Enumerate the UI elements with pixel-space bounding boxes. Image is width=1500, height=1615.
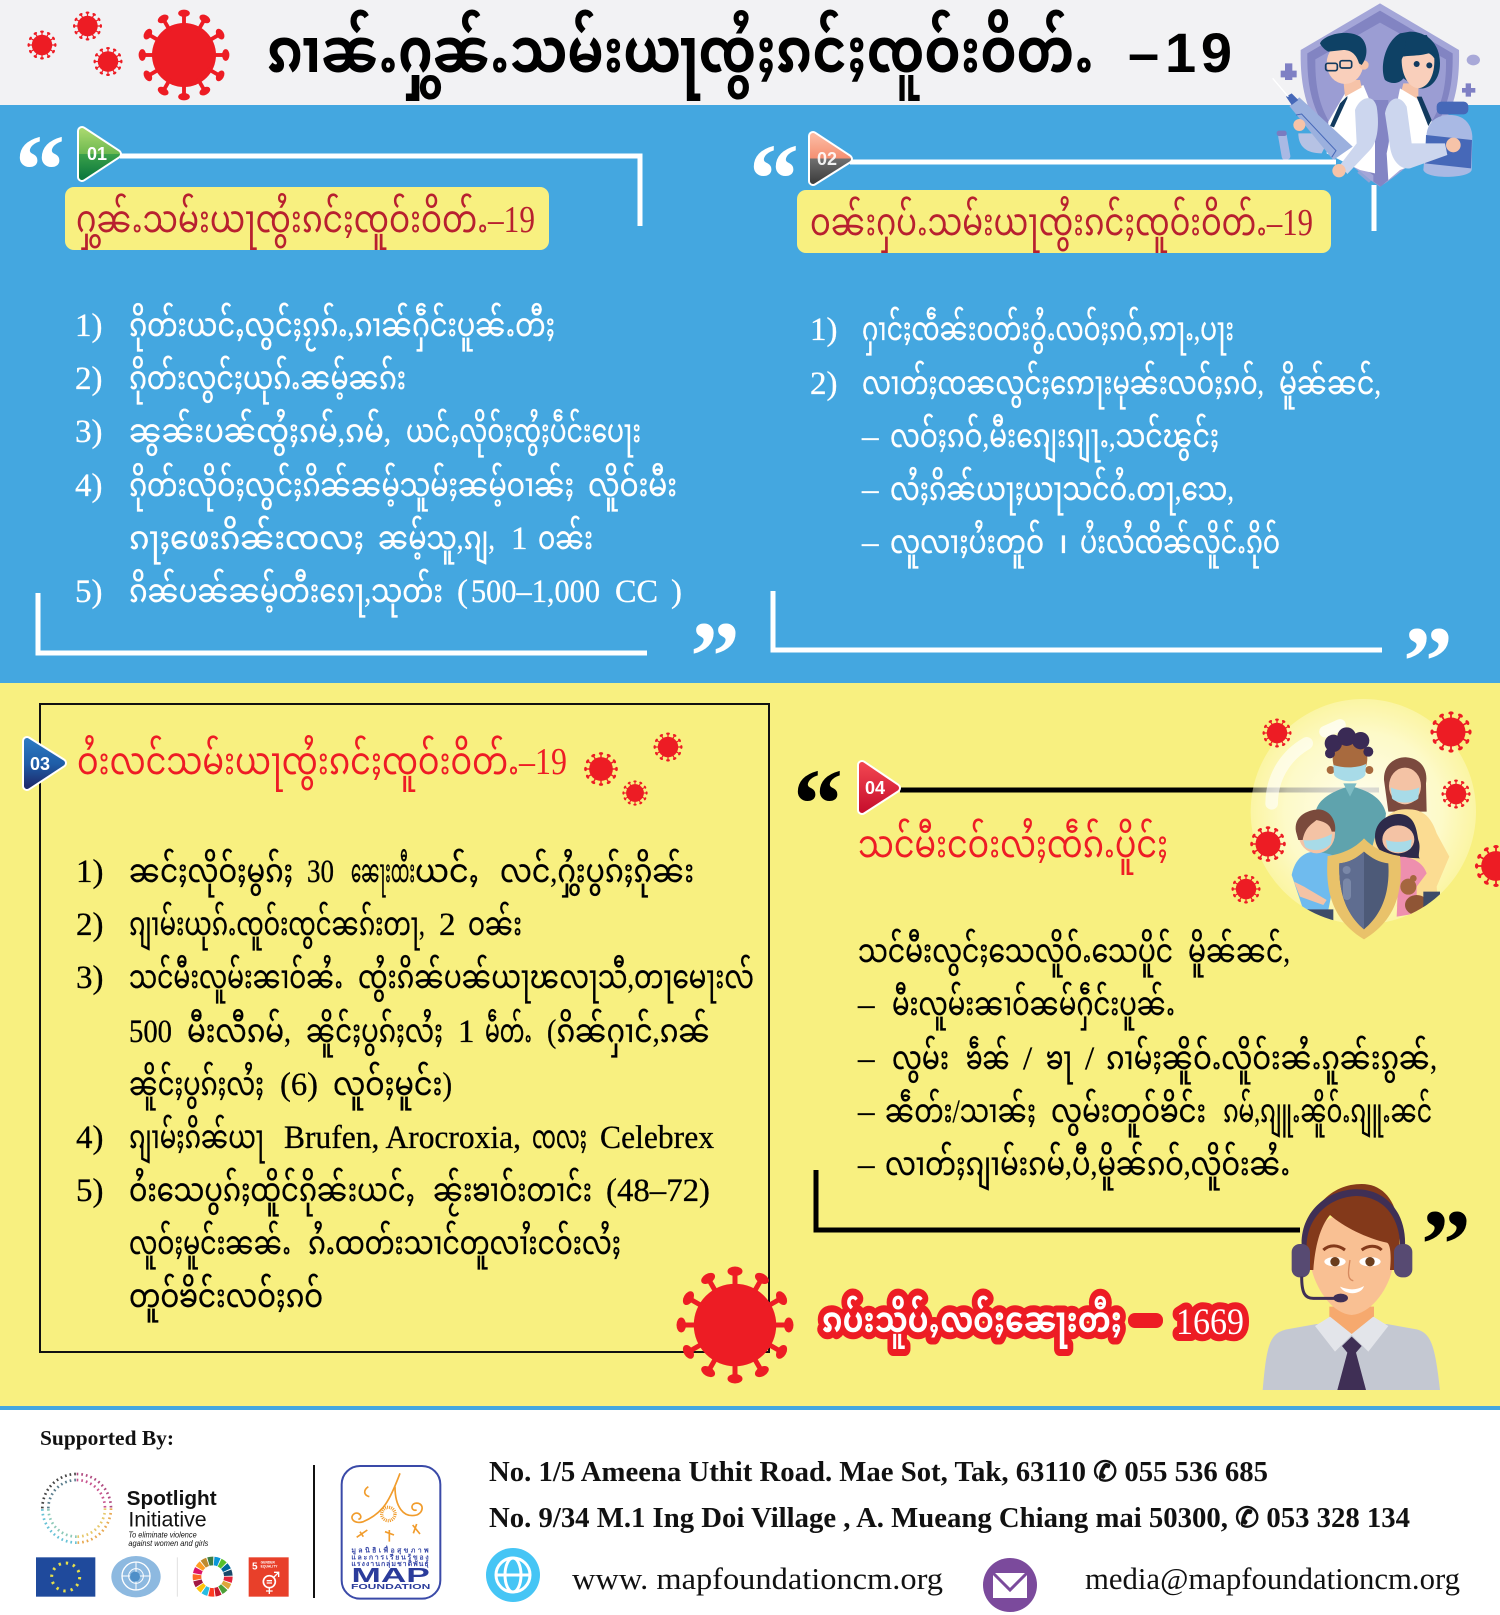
list 3: (ၵိၼ်ႁၢင်,ၵၼ် [547,1008,710,1057]
supported by: Supported By: [40,1426,174,1450]
list 3 [76,848,754,1322]
list 2: လဝ်ႈၵဝ်,မီးၵျေးၵျႃႉ,သင်ၽွင်ႈ [890,413,1219,462]
SDG 5 tile: 5 [252,1561,258,1572]
list 3: လူဝ်ႈမူင်း) [333,1061,452,1110]
SDG 5 tile: GENDER [261,1560,275,1564]
frame [40,704,769,1352]
list 3: (6) [280,1067,318,1103]
quote open: “ [15,114,65,225]
list 1: ၵိုတ်းယင်ႇလွင်ႈၵႂၵ်ႉ,ၵၢၼ်ႁဵင်းပူၼ်ႉတီႈ [129,302,555,351]
MAP logo [342,1466,440,1599]
list 2: – [861,525,879,561]
list 2: – [861,419,879,455]
SDG 5 tile [249,1557,289,1597]
EU flag [36,1557,95,1597]
panel: card 1 [15,114,740,712]
list 2: ၊ [1059,525,1068,561]
list 3: 5) [76,1173,104,1209]
list 3: 500 [129,1014,172,1050]
spotlight logo text [127,1487,217,1548]
list 3: 1 [458,1014,474,1050]
hotline: ၵပ်းသိူပ်ႇလဝ်ႈၼေႃးတီႈ [822,1295,1122,1349]
list 3: ၼင်ႈလိုဝ်ႈမွၵ်ႈ [129,848,293,897]
badge 02: 02 [817,149,837,169]
list 1: 1) [75,308,102,344]
list 3: Celebrex [600,1120,714,1156]
UN emblem [111,1556,161,1597]
address 2: No. 9/34 M.1 Ing Doi Village , A. Mueang Chiang mai 50300, ✆ 053 328 134 [489,1503,1410,1534]
frame bottom [816,1170,1300,1230]
website: www. mapfoundationcm.org [572,1561,943,1596]
text block: – [857,1147,875,1183]
heading box: ႁွၼ်ႉသမ်းယႃၸွႆးၵင်ႈၸူဝ်းဝိတ်ႉ–19 [76,193,535,250]
list 3: သင်မီးလူမ်းၼၢဝ်ၼႆႉ [129,954,343,1003]
list 3: ၵျၢမ်ႈၵိၼ်ယႃ [129,1114,265,1163]
logos: partners [36,1474,289,1597]
icon: globe [486,1548,540,1602]
SDG wheel [197,1561,228,1592]
list 1: ) [671,574,682,610]
list 3: မဵတ်ႉ [485,1008,532,1050]
badge 04: 04 [865,778,885,798]
list 3: 2 [439,907,456,943]
list 3: 4) [76,1120,104,1156]
list 1: ( [457,574,468,610]
text block: – [857,987,875,1023]
heading: သင်မီးငဝ်းလႆႈၸဵၵ်ႉပိူင်ႈ [858,818,1168,875]
list 1: ယင်ႇလိုဝ်ႈၸွႆႈပဵင်းပေႃး [406,408,641,457]
title: – [1128,21,1159,84]
list 1 [75,302,682,617]
list 3: ဝႆးသေပွၵ်ႈထိူင်ၵိုၼ်းယင်ႇ [129,1167,415,1216]
address 1: No. 1/5 Ameena Uthit Road. Mae Sot, Tak, 63110 ✆ 055 536 685 [489,1457,1268,1488]
list 3: ၸလႈ [532,1120,587,1156]
badge 03 [27,741,62,786]
text block: / [1085,1041,1095,1077]
text block: – [857,1041,875,1077]
list 2: မိူၼ်ၼင်, [1279,360,1381,409]
heading: ဝႆးလင်သမ်းယႃၸွႆးၵင်ႈၸူဝ်းဝိတ်ႉ–19 [77,735,567,792]
list 1: ၵႃႈဖေးၵိၼ်းၸလႈ [129,515,364,564]
text block: ၶဵၼ် [966,1035,1010,1077]
list 1: 4) [75,468,102,504]
list 1: ၵိုတ်းလွင်ႈယုၵ်ႉၼမ့်ၼၵ်း [129,355,406,404]
list 3: လင်,ႁွႆးပွၵ်ႈၵိုၼ်း [500,848,694,897]
panel: card 3 [27,704,794,1384]
list 3: ၸွႆးၵိၼ်ပၼ်ယႃၽလႃသီ,တႃမေႃးလ် [358,954,754,1003]
MAP logo: แรงงานกลุ่มชาติพันธุ์ [351,1559,429,1568]
list 2: လၢတ်ႈၸၼလွင်ႈဢေႃးမုၼ်းလဝ်ႈၵဝ်, [862,360,1264,409]
list 1: ၼွၼ်းပၼ်ၸွႆႈၵမ်,ၵမ်, [129,408,391,456]
text block: / [1023,1041,1033,1077]
list 1: 1 [511,521,528,557]
header viruses [27,10,229,100]
text block: ၶႃ [1046,1041,1073,1084]
list 2 [810,306,1381,568]
illustration: family in bubble [1251,699,1476,939]
list 2: လႆႈၵိၼ်ယႃႈယႃသင်ဝႆႉတႃ,သေ, [890,466,1234,515]
list 2: 2) [810,366,838,402]
divider [313,1465,315,1598]
text block: ၼဵတ်း/သၢၼ်ႈ [885,1088,1036,1130]
text block: – [857,1094,875,1130]
list 3: ၼႂ်းၶၢဝ်းတၢင်း [433,1167,592,1216]
title: 19 [1165,21,1232,84]
illustration: doctors [1273,3,1480,187]
spotlight logo text: Initiative [128,1508,207,1532]
hotline [822,1295,1244,1349]
list 3: ယင်ႇ [415,848,479,890]
icon: mail [983,1558,1037,1612]
spotlight logo text: To eliminate violence [128,1530,197,1539]
list 2: လူလၢႈပႆးတူဝ် [890,519,1044,568]
heading box [797,190,1331,253]
spotlight logo text: Spotlight [127,1487,217,1510]
badge 01: 01 [87,144,107,164]
heading viruses [584,732,683,806]
list 1: ၵိုတ်းလိုဝ်ႈလွင်ႈၵိၼ်ၼမ့်သူမ်ႈၼမ့်ဝၢၼ်ႈ [129,462,574,511]
quote open: “ [749,123,799,234]
badge 01 [82,131,117,177]
text block: ၵၢမ်ႈၼိူဝ်ႉလိူဝ်းၼႆႉၵူၼ်းၵွၼ်, [1106,1035,1437,1084]
surrounding viruses [1231,711,1500,904]
list 1: ၵိၼ်ပၼ်ၼမ့်တီးၵေႃ,သုတ်း [129,568,443,617]
frame bottom [773,591,1382,650]
list 3: တူဝ်ၶိင်းလဝ်ႈၵဝ် [129,1273,323,1322]
list 3: Brufen, Arocroxia, [284,1120,521,1156]
badge 02 [813,136,848,181]
list 3: 3) [76,960,104,996]
text block: မီးလူမ်းၼၢဝ်ၼမ်ႁဵင်းပူၼ်ႉ [892,981,1175,1030]
list 1: ဝၼ်း [538,515,593,557]
list 1: ၼမ့်သူ,ၵျ, [378,515,495,564]
yellow background [0,683,1500,1406]
text block: လၢတ်ႈၵျၢမ်းၵမ်,ပီ,မိူၼ်ၵဝ်,လိူဝ်းၼႆႉ [885,1141,1290,1190]
frame top [900,788,1379,792]
list 3: ၼိူင်ႈပွၵ်ႈလႆႈ [129,1061,264,1110]
list 3: လူဝ်ႈမူင်းၼၼ်ႉ [129,1220,291,1269]
footer [36,1426,1460,1612]
quote open: “ [793,748,843,859]
hotline dash [1128,1313,1163,1328]
large virus [676,1266,794,1384]
list 1: CC [615,574,658,610]
text block: လွမ်းတူဝ်ၶိင်း [1051,1088,1206,1137]
frame bottom [38,593,647,653]
text block: လွမ်း [892,1035,949,1083]
list 3: 1) [76,854,104,890]
blue background [0,105,1500,683]
list 1: 2) [75,361,102,397]
heading box: ဝၼ်းႁပ်ႉသမ်းယႃၸွႆးၵင်ႈၸူဝ်းဝိတ်ႉ–19 [810,196,1313,253]
text block: သင်မီးလွင်ႈသေလိူဝ်ႉသေပိူင် [858,928,1173,977]
badge 03: 03 [30,754,50,774]
hotline: 1669 [1176,1302,1244,1343]
quote close: ” [690,601,740,712]
list 3: ဝၼ်း [468,901,522,943]
title: ၵၢၼ်ႉႁွၼ်ႉသမ်းယႃၸွႆႈၵင်ႈၸူဝ်းဝိတ်ႉ [267,8,1094,101]
header band [0,0,1500,105]
MAP logo: และการเรียนรู้ของ [351,1552,429,1562]
illustration: call agent [1263,1184,1440,1390]
list 3: ၼိူင်ႈပွၵ်ႈလႆႈ [306,1008,443,1057]
list 3: (48–72) [606,1173,710,1209]
badge 04 [862,765,896,810]
list 3: ၵႆႉထတ်းသၢင်တူလၢႆးငဝ်းလႆႈ [308,1220,621,1269]
list 1: 3) [75,414,102,450]
MAP logo: มูลนิธิเพื่อสุขภาพ [351,1545,429,1556]
email: media@mapfoundationcm.org [1085,1561,1460,1596]
list 3: 30 [307,854,334,890]
spotlight logo ring [42,1474,111,1543]
spotlight logo text: against women and girls [128,1539,208,1548]
quote close: ” [1421,1189,1471,1300]
MAP logo: FOUNDATION [351,1582,430,1591]
SDG 5 tile: EQUALITY [261,1564,278,1568]
frame top [850,162,1374,231]
list 3: ၼေႃးထီး [351,848,415,897]
text block: မိူၼ်ၼင်, [1188,928,1290,977]
MAP logo: MAP [351,1564,430,1587]
heading box [65,187,549,250]
quote close: ” [1403,606,1453,717]
frame top [120,156,640,226]
list 1: 5) [75,574,102,610]
list 2: 1) [810,312,838,348]
list 3: 2) [76,907,104,943]
panel: card 2 [749,123,1453,717]
panel: card 4 [793,699,1500,1390]
text block [857,928,1437,1190]
list 1: 500–1,000 [471,574,600,610]
list 2: ႁၢင်ႈၸဵၼ်းဝတ်းဝွႆႉလဝ်ႈၵဝ်,ဢႃႉ,ပႃး [862,306,1234,355]
blue footer strip [0,1406,1500,1410]
list 2: – [861,472,879,508]
list 3: ၵျၢမ်းယုၵ်ႉၸူဝ်းၸွင်ၼၵ်းတႃ, [129,901,425,950]
list 1: လိူဝ်းမီး [588,462,677,511]
list 2: ပႆးလႆၸိၼ်လိူင်ႉၵိုဝ် [1080,519,1280,568]
list 3: မီးလီၵမ်, [187,1008,291,1050]
